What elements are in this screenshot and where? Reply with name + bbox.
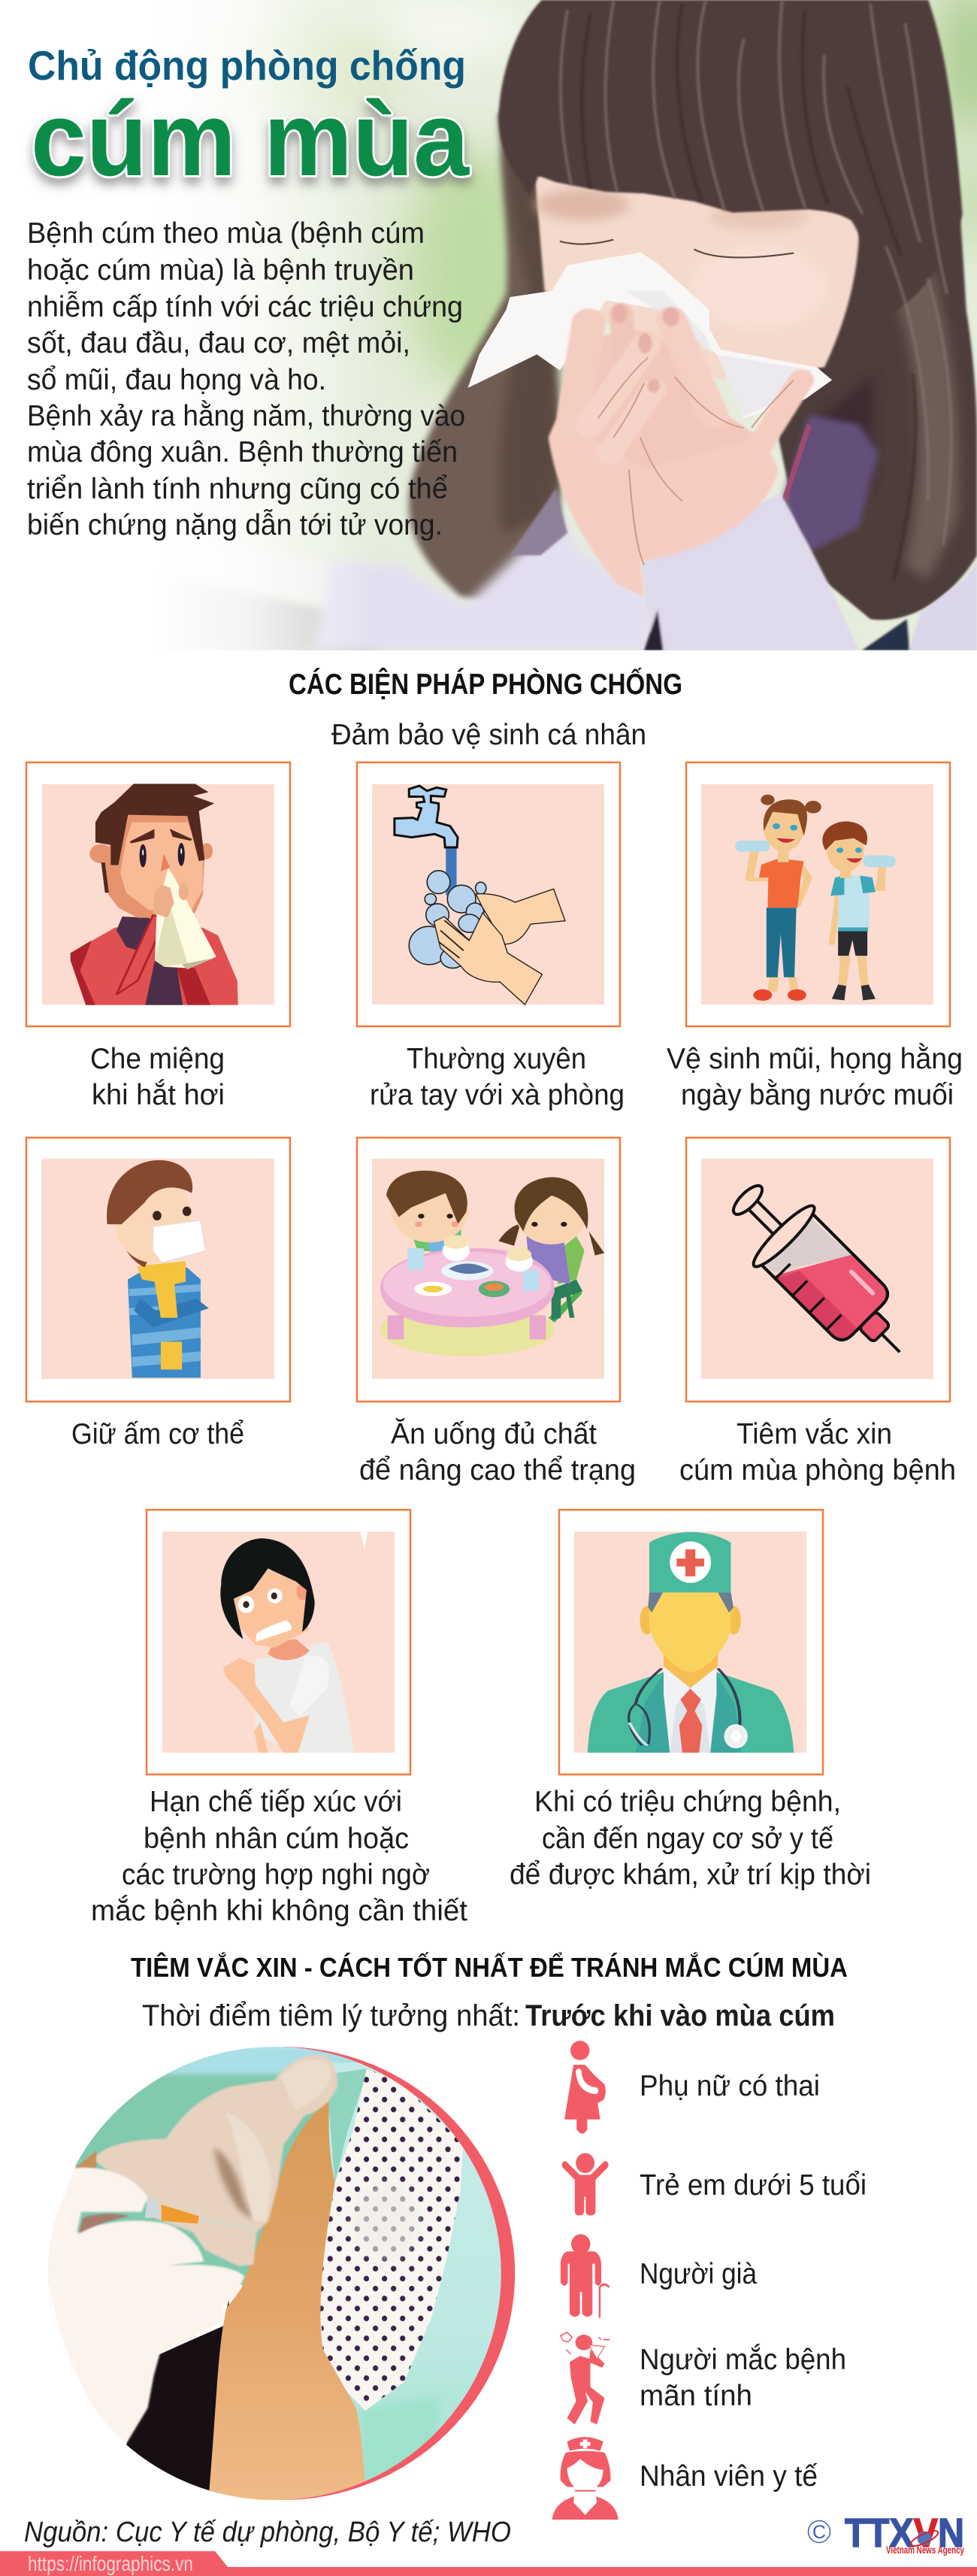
- intro paragraph: nhiễm cấp tính với các triệu chứng: [27, 291, 463, 323]
- subheading: ideal vaccination time: Thời điểm tiêm lý tưởng nhất:: [142, 1999, 520, 2032]
- icon: syringe: [712, 1165, 930, 1382]
- label: chronic illness: [640, 2344, 846, 2412]
- icon: children with water bottles: [735, 795, 895, 1001]
- footer bar with URL: [0, 2551, 977, 2576]
- red ring: [48, 2047, 515, 2500]
- icon: children eating at table: [380, 1171, 604, 1356]
- lower glove: [48, 2168, 244, 2443]
- tissue: [467, 253, 832, 418]
- subheading: ideal vaccination time: [142, 1999, 835, 2032]
- icon: child: [565, 2153, 606, 2215]
- closed eyes: [560, 240, 794, 257]
- panel: washing hands: [357, 762, 620, 1026]
- label: limit contact: [91, 1786, 467, 1927]
- label: limit contact: các trường hợp nghi ngờ: [122, 1859, 430, 1891]
- subheading: personal hygiene: Đảm bảo vệ sinh cá nhân: [331, 719, 646, 751]
- icon: pregnant woman: [564, 2041, 606, 2134]
- subheading: ideal vaccination time: Trước khi vào mùa cúm: [525, 1999, 835, 2032]
- intro paragraph: Bệnh cúm theo mùa (bệnh cúm: [27, 217, 425, 250]
- label: vaccination: cúm mùa phòng bệnh: [679, 1454, 956, 1487]
- icon: tap and soapy hands: [395, 786, 565, 1005]
- logo: TTXVN: TTXVN: [845, 2511, 964, 2556]
- label: nutrition: để nâng cao thể trạng: [359, 1454, 636, 1487]
- title line 2: cúm mùa: [31, 80, 470, 198]
- arm: [208, 2101, 367, 2504]
- dark background: [126, 2297, 229, 2504]
- left hair: [409, 86, 560, 603]
- icon: chronically ill person: [561, 2332, 609, 2424]
- left fade: [0, 0, 350, 650]
- icon: doctor: [588, 1532, 794, 1753]
- label: chronic illness: mãn tính: [640, 2380, 752, 2412]
- intro paragraph: sổ mũi, đau họng và ho.: [27, 364, 326, 396]
- hair strands: [561, 1, 951, 546]
- label: pregnant women: Phụ nữ có thai: [640, 2070, 820, 2102]
- heading: prevention measures: CÁC BIỆN PHÁP PHÒNG CHỐNG: [289, 667, 682, 701]
- chest: [782, 415, 878, 552]
- label: medical staff: Nhân viên y tế: [640, 2460, 818, 2493]
- label: nose and throat: [667, 1043, 963, 1111]
- copyright mark: C: [812, 2522, 826, 2543]
- label: vaccination: Tiêm vắc xin: [737, 1418, 892, 1450]
- label: cover mouth: [90, 1043, 225, 1111]
- label: chronic illness: Người mắc bệnh: [640, 2344, 846, 2376]
- label: vaccination: [679, 1418, 956, 1487]
- label: limit contact: Hạn chế tiếp xúc với: [150, 1786, 402, 1818]
- intro paragraph: Bệnh xảy ra hằng năm, thường vào: [27, 400, 465, 432]
- upper glove: [96, 2054, 337, 2266]
- label: nutrition: [359, 1418, 636, 1487]
- face: [535, 176, 859, 380]
- icon: elderly person: [561, 2234, 609, 2318]
- footer bar with URL: https://infographics.vn: [28, 2552, 193, 2575]
- polka-dot gown: [320, 2068, 463, 2411]
- panel: man covering mouth with tissue: [26, 762, 290, 1026]
- sweater: [314, 511, 652, 650]
- label: see a doctor: Khi có triệu chứng bệnh,: [534, 1786, 841, 1818]
- label: nose and throat: ngày bằng nước muối: [681, 1079, 954, 1111]
- label: wash hands: [370, 1043, 625, 1111]
- panel: vaccination: [686, 1138, 950, 1402]
- hero photo: girl blowing nose into a tissue: [217, 0, 977, 650]
- icon: masked child with scarf: [107, 1160, 209, 1377]
- label: see a doctor: cần đến ngay cơ sở y tế: [542, 1823, 833, 1855]
- panel: rinsing nose and throat: [686, 762, 950, 1026]
- label: see a doctor: [510, 1786, 871, 1891]
- label: nutrition: Ăn uống đủ chất: [391, 1418, 597, 1450]
- syringe: [145, 2197, 162, 2218]
- label: cover mouth: khi hắt hơi: [92, 1079, 225, 1111]
- icon: sneezing man: [71, 783, 238, 1005]
- title line 1: Chủ động phòng chống: [28, 42, 466, 89]
- hair fringe: [498, 0, 963, 318]
- label: wash hands: rửa tay với xà phòng: [370, 1079, 625, 1111]
- copyright mark: [809, 2520, 830, 2543]
- intro paragraph: hoặc cúm mùa) là bệnh truyền: [27, 254, 414, 286]
- photo: vaccination in circular frame: [45, 2045, 519, 2504]
- hands: [549, 304, 801, 597]
- intro paragraph: [27, 217, 465, 541]
- icon: medical worker: [552, 2437, 619, 2520]
- label: elderly: Người già: [640, 2258, 757, 2290]
- panel: limit contact: [147, 1510, 410, 1774]
- intro paragraph: biến chứng nặng dẫn tới tử vong.: [27, 509, 443, 541]
- icon: coughing man: [220, 1532, 368, 1753]
- panel: keep warm: [26, 1138, 290, 1402]
- intro paragraph: mùa đông xuân. Bệnh thường tiến: [27, 436, 458, 468]
- panel: see a doctor: [559, 1510, 823, 1774]
- source note: Nguồn: Cục Y tế dự phòng, Bộ Y tế; WHO: [24, 2517, 511, 2548]
- heading: vaccine section: TIÊM VẮC XIN - CÁCH TỐT NHẤT ĐỂ TRÁNH MẮC CÚM MÙA: [131, 1951, 848, 1983]
- intro paragraph: sốt, đau đầu, đau cơ, mệt mỏi,: [27, 327, 410, 359]
- right hair: [777, 215, 977, 621]
- label: nose and throat: Vệ sinh mũi, họng hằng: [667, 1043, 963, 1075]
- label: wash hands: Thường xuyên: [407, 1043, 586, 1075]
- intro paragraph: triển lành tính nhưng cũng có thể: [27, 473, 448, 505]
- panel: nutrition: [357, 1138, 620, 1402]
- label: see a doctor: để được khám, xử trí kịp thời: [510, 1859, 871, 1891]
- label: limit contact: bệnh nhân cúm hoặc: [144, 1823, 409, 1855]
- label: keep warm: Giữ ấm cơ thể: [71, 1418, 244, 1450]
- label: children under 5: Trẻ em dưới 5 tuổi: [640, 2169, 867, 2202]
- label: limit contact: mắc bệnh khi không cần thiết: [91, 1895, 467, 1927]
- label: cover mouth: Che miệng: [90, 1043, 225, 1075]
